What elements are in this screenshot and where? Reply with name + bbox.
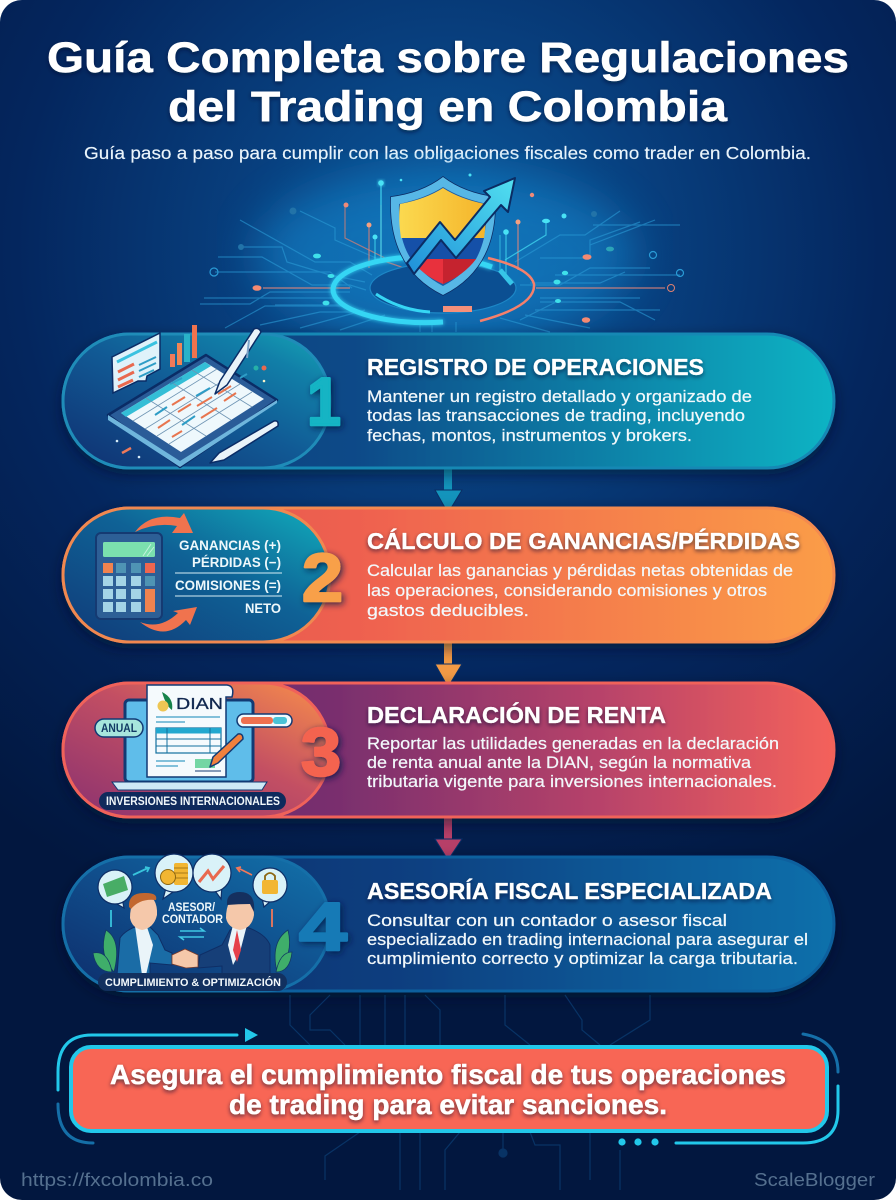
growth arrow [407,178,515,274]
bubble: trend [193,854,231,899]
exchange arrows [180,928,204,940]
panel: step 1 registro de operaciones [63,325,834,468]
title [47,34,849,131]
description: fechas, montos, instrumentos y brokers. [367,426,692,445]
description [367,911,808,968]
label: asesor contador: ASESOR/ [168,902,216,914]
heading: DECLARACIÓN DE RENTA [367,701,666,728]
number 1: 1 [307,364,341,440]
circuit nodes [210,174,684,323]
chat card chart [112,333,160,393]
icon: laptop with DIAN form [95,685,292,810]
connecting arrow 2 to 3 [435,640,462,687]
callout frame accents [58,1028,838,1146]
description: todas las transacciones de trading, incluyendo [367,406,745,425]
description: gastos deducibles. [367,601,529,620]
DIAN logo [158,692,223,713]
cycle arrows [111,867,272,927]
arrow: top curved [135,513,193,533]
label: asesor contador: CONTADOR [162,914,224,926]
label: cumplimiento y optimizacion: CUMPLIMIENTO & OPTIMIZACIÓN [105,976,281,989]
handshake [172,949,198,968]
bottom circuit pattern [290,995,650,1190]
callout: Asegura el cumplimiento fiscal de tus operaciones [110,1059,786,1090]
panel: step 2 calculo de ganancias y perdidas [63,508,834,642]
description: de renta anual ante la DIAN, según la normativa [367,753,752,772]
callout: de trading para evitar sanciones. [229,1089,667,1120]
description: especializado en trading internacional para asegurar el [367,930,808,949]
label: asesor contador [162,902,224,926]
heading: ASESORÍA FISCAL ESPECIALIZADA [367,877,772,904]
leaves [93,930,292,972]
title: Guía Completa sobre Regulaciones [47,34,849,82]
description: Consultar con un contador o asesor fiscal [367,911,727,930]
heading: CÁLCULO DE GANANCIAS/PÉRDIDAS [367,527,800,554]
panel: step 4 asesoria fiscal especializada [63,854,834,991]
circuit lines [200,211,680,332]
footer brand: ScaleBlogger [754,1170,875,1190]
title: del Trading en Colombia [168,83,728,131]
subtitle: Guía paso a paso para cumplir con las obligaciones fiscales como trader en Colombia. [84,143,811,163]
description: las operaciones, considerando comisiones y otros [367,581,767,600]
panel: step 3 declaracion de renta [63,683,834,817]
icon: advisors handshake [93,854,292,991]
description [367,734,779,791]
bubble: money [98,870,132,908]
calculation labels [175,538,282,616]
heading: REGISTRO DE OPERACIONES [367,354,704,380]
stylus pen [215,328,261,394]
icon: tablet with spreadsheet [108,325,278,467]
label: inversiones internacionales: INVERSIONES INTERNACIONALES [106,796,280,808]
description [367,561,793,620]
number 4: 4 [299,889,347,965]
progress bar [237,714,292,727]
connecting arrow 3 to 4 [435,815,462,860]
glowing ring [333,257,534,323]
arrow: bottom curved [140,607,197,632]
label: inversiones internacionales [99,792,286,810]
person left [117,893,172,975]
second stylus [210,421,278,463]
label: anual: ANUAL [101,723,137,735]
calculation labels: COMISIONES (=) [175,578,281,593]
callout [71,1047,827,1131]
connecting arrow 1 to 2 [435,466,462,513]
DIAN logo: DIAN [176,696,223,713]
hero: circuit and shield illustration [200,170,684,340]
calculation labels: NETO [245,601,281,616]
shield [391,177,495,295]
label: anual [95,719,143,737]
description: Mantener un registro detallado y organizado de [367,387,752,406]
bubble: coins [155,854,193,899]
description: Reportar las utilidades generadas en la declaración [367,734,779,753]
mini bar chart [170,325,197,367]
description: tributaria vigente para inversiones internacionales. [367,772,777,791]
calculation labels: PÉRDIDAS (−) [192,555,281,570]
label: cumplimiento y optimizacion [98,973,287,991]
calculation labels: GANANCIAS (+) [179,538,281,553]
footer url: https://fxcolombia.co [21,1170,213,1190]
description [367,387,752,445]
number 2: 2 [302,540,343,616]
icon: calculator [96,533,162,619]
pen [210,734,243,767]
description: cumplimiento correcto y optimizar la carga tributaria. [367,949,798,968]
bubble: lock [253,868,287,907]
number 3: 3 [301,714,341,790]
description: Calcular las ganancias y pérdidas netas obtenidas de [367,561,793,580]
person right [198,892,270,975]
